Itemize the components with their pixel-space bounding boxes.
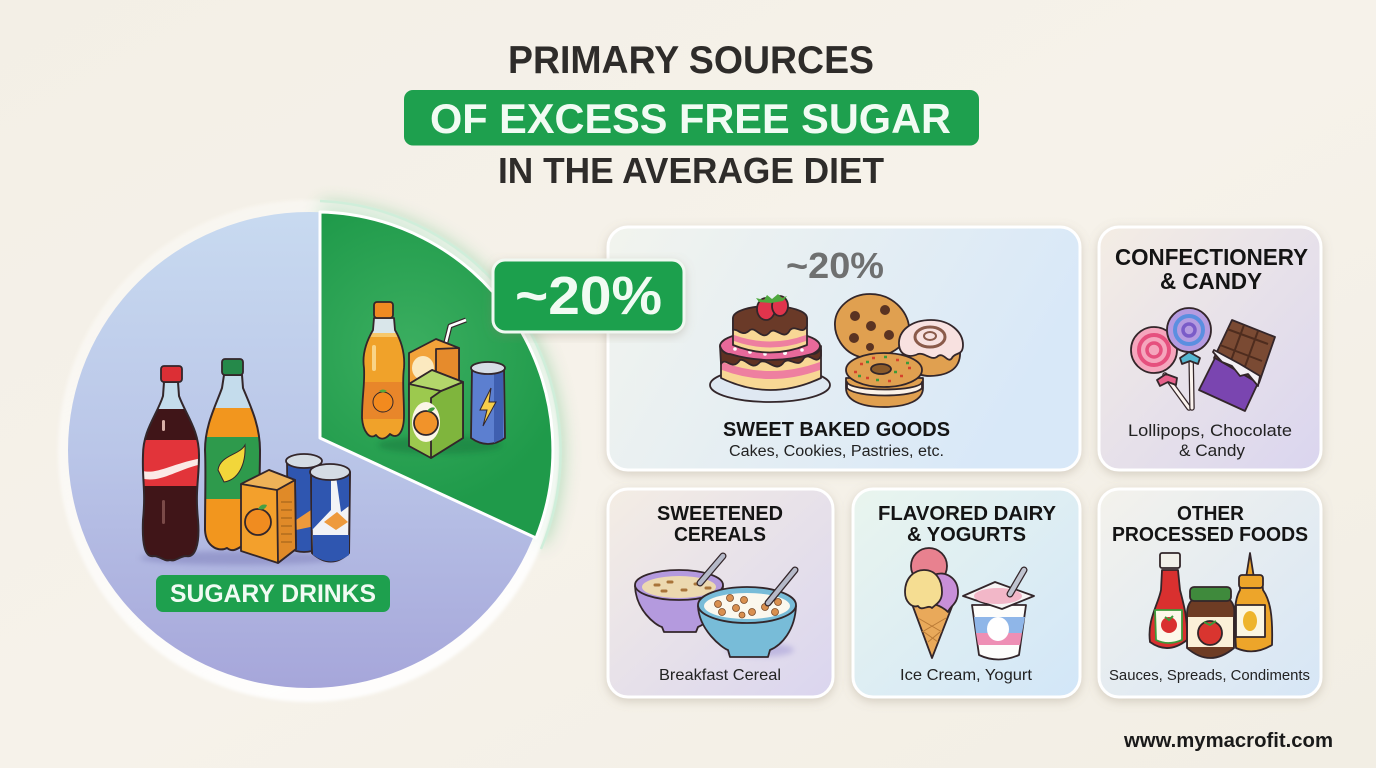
icon: spread jar: [1187, 587, 1234, 658]
percentage badge: ~20%: [515, 266, 662, 326]
pie chart: [58, 200, 563, 702]
cake: [710, 294, 830, 402]
orange soda bottle: [204, 358, 261, 552]
card description: Ice Cream, Yogurt: [900, 667, 1033, 684]
icon: cake and pastries: [710, 294, 963, 407]
icon: green slice drinks: [360, 302, 505, 458]
card: sweet baked goods: [608, 227, 1080, 470]
juice box front: [409, 370, 463, 458]
cola bottle: [140, 366, 202, 560]
card description: [1128, 421, 1292, 460]
pie ring green edge: [320, 201, 561, 549]
energy can: [471, 362, 505, 444]
pie slice: sugary drinks blue: [68, 212, 550, 688]
pie slice: green 20 percent: [320, 212, 553, 538]
icon: cereal bowls: [635, 556, 796, 657]
icon: lollipops and chocolate: [1131, 308, 1275, 411]
percentage badge: [493, 260, 684, 332]
website url: www.mymacrofit.com: [1123, 730, 1333, 752]
pie glow: [320, 202, 563, 545]
back can: [286, 454, 322, 552]
title: [404, 39, 979, 191]
card heading: [1112, 502, 1308, 546]
card: sweetened cereals: [608, 489, 833, 697]
purple bowl: [635, 556, 723, 632]
icon: ketchup bottle: [1149, 553, 1187, 648]
card percentage: ~20%: [786, 245, 884, 286]
card description: & Candy: [1179, 441, 1246, 460]
card: flavored dairy and yogurts: [853, 489, 1080, 697]
title banner: OF EXCESS FREE SUGAR: [430, 95, 951, 142]
card heading: SWEET BAKED GOODS: [723, 418, 950, 441]
cinnamon bun: [899, 320, 963, 376]
card heading: FLAVORED DAIRY: [878, 502, 1056, 525]
card heading: CONFECTIONERY: [1115, 244, 1308, 270]
juice box back: [409, 320, 466, 400]
card description: Cakes, Cookies, Pastries, etc.: [729, 443, 944, 460]
pie outer ring: [58, 200, 560, 702]
title line 1: PRIMARY SOURCES: [508, 39, 874, 82]
card heading: OTHER: [1177, 502, 1244, 525]
card description: Breakfast Cereal: [659, 667, 781, 684]
front can: [310, 464, 350, 562]
card heading: [657, 502, 783, 546]
icon: mustard bottle: [1235, 553, 1272, 651]
title line 3: IN THE AVERAGE DIET: [498, 150, 884, 191]
chocolate bar: [1199, 320, 1275, 411]
blue bowl: [698, 570, 796, 657]
card heading: SWEETENED: [657, 502, 783, 525]
donut sandwich: [846, 353, 923, 407]
card description: Sauces, Spreads, Condiments: [1109, 667, 1310, 684]
cookie: [835, 294, 909, 358]
sugary drinks label: SUGARY DRINKS: [170, 580, 376, 608]
orange juice box: [241, 470, 296, 563]
sugary drinks label: [156, 575, 390, 612]
orange bottle: [360, 302, 408, 439]
card heading: CEREALS: [674, 523, 766, 546]
card heading: PROCESSED FOODS: [1112, 523, 1308, 546]
card: other processed foods: [1099, 489, 1321, 697]
card heading: & CANDY: [1160, 268, 1262, 294]
pink lollipop: [1131, 327, 1189, 408]
card heading: [878, 502, 1056, 546]
purple lollipop: [1167, 308, 1211, 408]
icon: yogurt cup: [963, 570, 1034, 660]
card: confectionery and candy: [1099, 227, 1321, 470]
card heading: & YOGURTS: [907, 523, 1026, 546]
card heading: [1115, 244, 1308, 294]
icon: ice cream cone: [905, 548, 958, 658]
card description: Lollipops, Chocolate: [1128, 421, 1292, 440]
icon: main sugary drinks: [140, 359, 350, 565]
